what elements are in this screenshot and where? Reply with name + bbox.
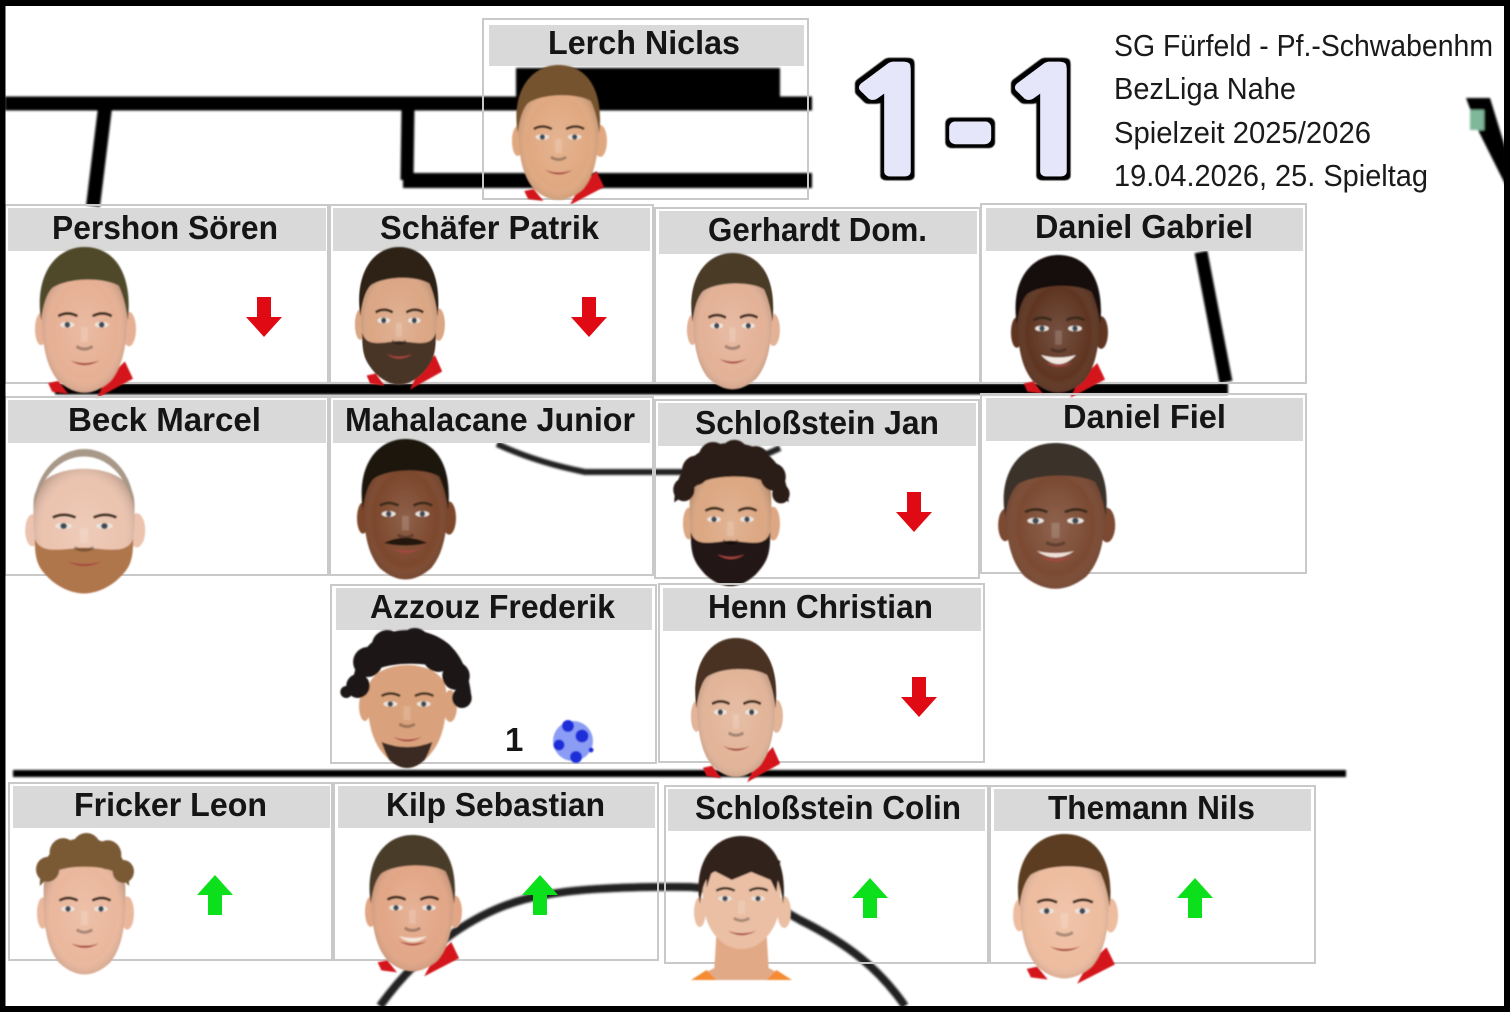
score: - — [947, 74, 992, 204]
match information — [1114, 28, 1493, 193]
heading: Themann Nils: Themann Nils — [1048, 789, 1255, 826]
icon: player portrait — [35, 247, 136, 398]
panel: Kilp Sebastian — [334, 783, 658, 976]
icon: blue football — [553, 720, 594, 763]
score: 1 — [996, 54, 1103, 195]
panel: Mahalacane Junior — [330, 397, 653, 579]
heading: Fricker Leon: Fricker Leon — [74, 786, 267, 823]
panel: Schloßstein Jan — [655, 400, 979, 586]
panel: Pershon Sören — [5, 205, 328, 398]
panel: Fricker Leon — [9, 783, 332, 974]
match information: Spielzeit 2025/2026 — [1114, 115, 1371, 150]
heading: Schloßstein Jan: Schloßstein Jan — [695, 404, 939, 441]
icon: green up arrow — [852, 878, 888, 918]
decorative top line — [512, 14, 790, 22]
panel: Beck Marcel — [5, 397, 328, 593]
icon: player portrait — [36, 833, 134, 974]
panel: Gerhardt Dom. — [655, 208, 980, 389]
icon: player portrait — [691, 638, 783, 782]
icon: player portrait — [355, 247, 445, 390]
icon: pitch corner mark — [1466, 98, 1506, 186]
icon: player portrait — [512, 65, 607, 205]
icon: red down arrow — [571, 297, 607, 337]
icon: player portrait — [998, 443, 1115, 589]
match information: BezLiga Nahe — [1114, 71, 1296, 106]
heading: Daniel Gabriel: Daniel Gabriel — [1035, 208, 1253, 245]
panel: Schäfer Patrik — [330, 205, 653, 390]
panel: Azzouz Frederik — [331, 585, 656, 768]
heading: Lerch Niclas: Lerch Niclas — [548, 24, 740, 61]
heading: Kilp Sebastian: Kilp Sebastian — [386, 786, 605, 823]
score: 1 — [840, 54, 947, 195]
panel: Schloßstein Colin — [665, 786, 988, 980]
icon: green up arrow — [522, 875, 558, 915]
icon: player portrait — [340, 628, 472, 768]
goal count: 1 — [505, 721, 523, 758]
heading: Schloßstein Colin: Schloßstein Colin — [695, 789, 961, 826]
icon: green up arrow — [197, 875, 233, 915]
heading: Mahalacane Junior: Mahalacane Junior — [345, 401, 635, 438]
heading: Azzouz Frederik: Azzouz Frederik — [370, 588, 616, 625]
score — [840, 54, 1103, 204]
heading: Gerhardt Dom.: Gerhardt Dom. — [708, 211, 927, 248]
panel: Themann Nils — [990, 786, 1315, 984]
icon: player portrait — [365, 835, 462, 976]
panel: Daniel Fiel — [981, 394, 1306, 589]
icon: player portrait — [691, 836, 792, 980]
icon: green up arrow — [1177, 878, 1213, 918]
panel: Lerch Niclas — [483, 19, 808, 205]
panel: Henn Christian — [659, 584, 984, 782]
heading: Henn Christian: Henn Christian — [708, 588, 933, 625]
match information: 19.04.2026, 25. Spieltag — [1114, 158, 1428, 193]
icon: player portrait — [673, 440, 790, 586]
icon: player portrait — [687, 253, 780, 389]
icon: player portrait — [357, 439, 456, 579]
heading: Beck Marcel: Beck Marcel — [68, 401, 261, 438]
icon: red down arrow — [896, 492, 932, 532]
icon: player portrait — [25, 449, 145, 593]
icon: player portrait — [1011, 255, 1108, 398]
icon: red down arrow — [246, 297, 282, 337]
panel: Daniel Gabriel — [981, 204, 1306, 398]
icon: red down arrow — [901, 677, 937, 717]
heading: Schäfer Patrik: Schäfer Patrik — [380, 209, 600, 246]
heading: Daniel Fiel: Daniel Fiel — [1063, 398, 1226, 435]
heading: Pershon Sören: Pershon Sören — [52, 209, 278, 246]
icon: player portrait — [1013, 834, 1118, 984]
